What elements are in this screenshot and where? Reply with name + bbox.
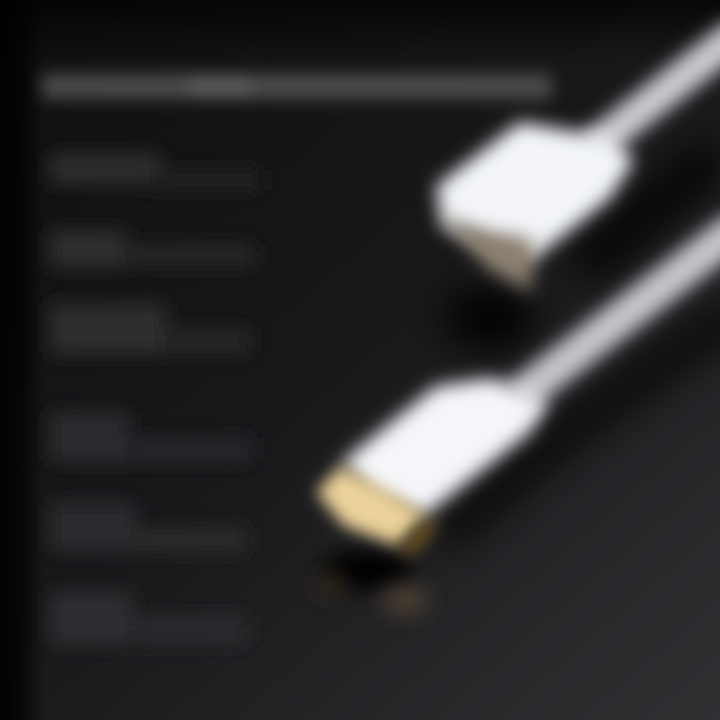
lower cable cord	[515, 226, 720, 400]
upper HDMI cable	[436, 32, 720, 292]
list item 5	[50, 502, 248, 552]
upper cable cord	[590, 32, 720, 150]
upper connector gold tip	[440, 216, 532, 292]
left edge band	[0, 0, 44, 720]
title bar (illegible blurred heading)	[42, 74, 552, 99]
lower connector gold tip	[316, 466, 426, 546]
lower connector reflection	[314, 550, 429, 614]
lower connector gold shadow edge	[400, 518, 438, 558]
lower connector body	[342, 378, 548, 516]
lower HDMI cable	[316, 226, 720, 558]
upper connector body	[436, 122, 634, 262]
list item 4	[50, 412, 253, 462]
upper connector shadow	[444, 150, 720, 348]
list item 2	[50, 230, 256, 268]
list item 6	[50, 592, 247, 644]
list item 1	[50, 154, 262, 190]
list item 3	[50, 304, 250, 354]
lower cable shadow	[440, 310, 720, 540]
text list (illegible blurred rows)	[50, 154, 262, 644]
top shade	[0, 0, 720, 60]
